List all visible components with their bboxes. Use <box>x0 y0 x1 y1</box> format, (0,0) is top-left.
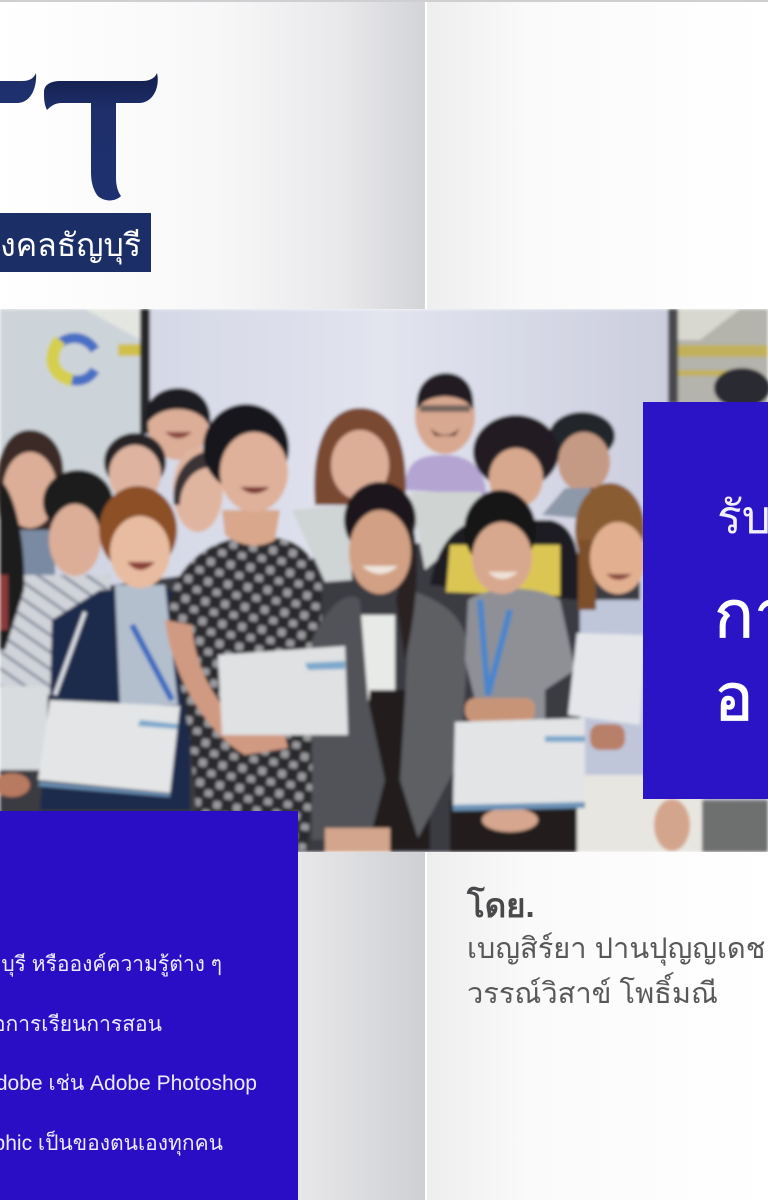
photo people front row <box>0 404 768 852</box>
panel: top left page <box>0 0 768 309</box>
photo body mass behind people <box>0 540 640 852</box>
panel: bottom right page <box>427 852 768 1200</box>
photo wall logo <box>53 338 140 381</box>
authors block <box>466 886 765 1010</box>
author one: เบญสิร์ยา ปานปุญญเดช <box>467 932 765 966</box>
panel: bottom left page <box>298 852 425 1200</box>
logo: RMUTT letters <box>0 73 158 200</box>
logo: university name band <box>0 213 151 272</box>
photo certificates in front <box>0 633 645 811</box>
panel: top right page <box>427 2 768 309</box>
photo certificates at back <box>292 492 482 582</box>
objective line 1: บุรี หรือองค์ความรู้ต่าง ๆ <box>1 952 222 977</box>
photo people back row <box>0 373 615 590</box>
author two: วรรณ์วิสาข์ โพธิ์มณี <box>467 972 718 1010</box>
panel: bottom blue objectives box <box>0 811 298 1200</box>
objective line 4: phic เป็นของตนเองทุกคน <box>0 1129 223 1156</box>
objective line 3: dobe เช่น Adobe Photoshop <box>0 1072 257 1095</box>
authors heading: โดย. <box>466 886 535 924</box>
photo background wall <box>0 309 768 852</box>
photo: group holding certificates <box>0 309 768 852</box>
title line 3: อ <box>714 660 754 734</box>
panel: right blue title box <box>643 402 768 799</box>
